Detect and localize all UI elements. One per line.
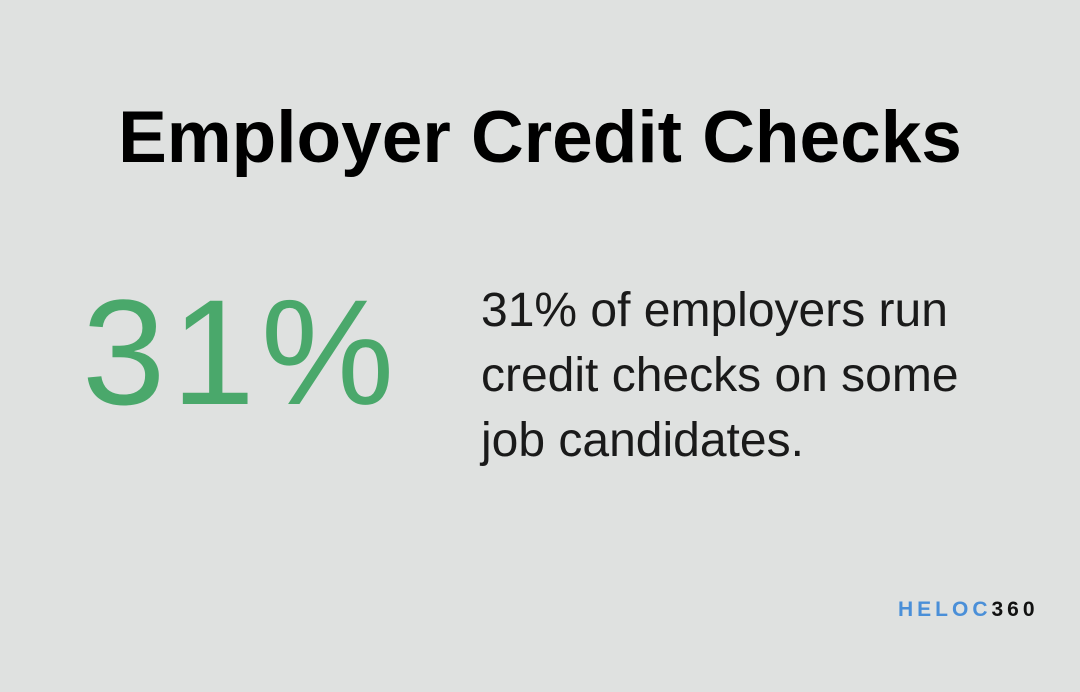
description text: credit checks on some bbox=[481, 349, 959, 402]
big stat: 31% bbox=[82, 268, 400, 436]
description text: job candidates. bbox=[481, 414, 804, 467]
description text bbox=[480, 284, 959, 467]
logo: HELOC360 bbox=[898, 598, 1039, 621]
description text: 31% of employers run bbox=[481, 284, 948, 337]
title: Employer Credit Checks bbox=[118, 97, 962, 178]
